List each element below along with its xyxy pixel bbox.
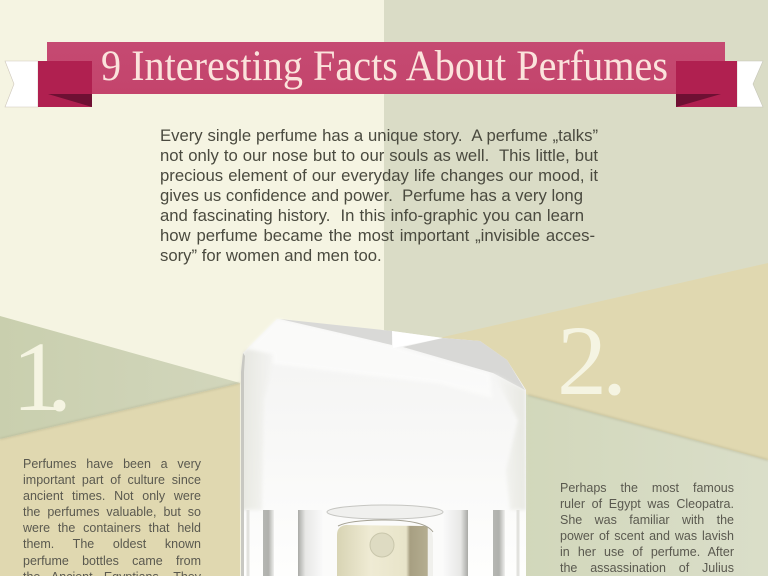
fact 1 text: ancient times. Not only were	[23, 489, 201, 503]
bottle top band	[247, 319, 492, 398]
right ribbon fold	[676, 61, 737, 107]
number 2: 2.	[557, 305, 627, 416]
left ribbon tail	[5, 61, 38, 107]
fact 1 text: the perfumes valuable, but so	[23, 505, 201, 519]
bottle lower edges	[248, 510, 518, 576]
panel: fact 2 tan wedge	[430, 263, 768, 460]
fact 1 text: perfume bottles came from	[23, 554, 201, 568]
cup rim	[327, 505, 443, 519]
fact 2 text: ruler of Egypt was Cleopatra.	[560, 497, 734, 511]
background: cream left half	[0, 0, 384, 576]
left fold shadow	[48, 94, 92, 107]
ribbon main strip	[47, 42, 725, 94]
panel: fact 1 tan area	[0, 383, 240, 576]
right ribbon tail	[737, 61, 763, 107]
intro paragraph: gives us confidence and power. Perfume has a very long	[160, 186, 583, 205]
fact 1 text: were the containers that held	[23, 521, 201, 535]
bottle	[241, 319, 526, 576]
panel: fact 2 green area	[440, 338, 768, 576]
glass strip far left	[263, 510, 274, 576]
fact 2 text: Perhaps the most famous	[560, 481, 734, 495]
glass strip far right	[493, 510, 505, 576]
intro paragraph: how perfume became the most important „invisible acces-	[160, 226, 595, 245]
fact 2 text: in her use of perfume. After	[560, 545, 734, 559]
intro paragraph: sory” for women and men too.	[160, 246, 382, 265]
title: 9 Interesting Facts About Perfumes	[101, 43, 668, 90]
liquid neck outline	[338, 520, 433, 532]
fact 1 text: important part of culture since	[23, 473, 201, 487]
number 1: 1.	[12, 321, 72, 432]
panel: fact 1 green wedge	[0, 316, 240, 439]
perfume liquid	[337, 525, 433, 576]
bottle top left facet	[280, 319, 392, 345]
bottle body	[241, 319, 526, 576]
intro paragraph: not only to our nose but to our souls as well. This little, but	[160, 146, 598, 165]
fact 1 text: them. The oldest known	[23, 537, 201, 551]
intro paragraph: and fascinating history. In this info-graphic you can learn	[160, 206, 584, 225]
bottle left facet	[241, 345, 274, 510]
bottle right edge facet	[493, 373, 526, 510]
ribbon banner	[5, 42, 763, 107]
bottle top right facet	[403, 338, 525, 390]
bottle top highlight	[392, 331, 443, 348]
bottle left outer edge	[241, 353, 245, 576]
fact 2 text: the assassination of Julius	[560, 561, 734, 575]
left ribbon fold	[38, 61, 92, 107]
intro paragraph: Every single perfume has a unique story. A perfume „talks”	[160, 126, 598, 145]
right fold shadow	[676, 94, 721, 107]
inner glass left	[298, 510, 323, 576]
intro paragraph: precious element of our everyday life changes our mood, it	[160, 166, 598, 185]
background: sage right half	[384, 0, 768, 576]
fact 1 text	[23, 457, 201, 576]
inner glass right	[443, 510, 468, 576]
inner cup centre	[323, 510, 443, 576]
fact 2 text: She was familiar with the	[560, 513, 734, 527]
dip ball	[370, 533, 394, 557]
fact 1 text: Perfumes have been a very	[23, 457, 201, 471]
fact 2 text: power of scent and was lavish	[560, 529, 734, 543]
fact 2 text	[560, 481, 734, 575]
intro paragraph	[160, 126, 598, 265]
